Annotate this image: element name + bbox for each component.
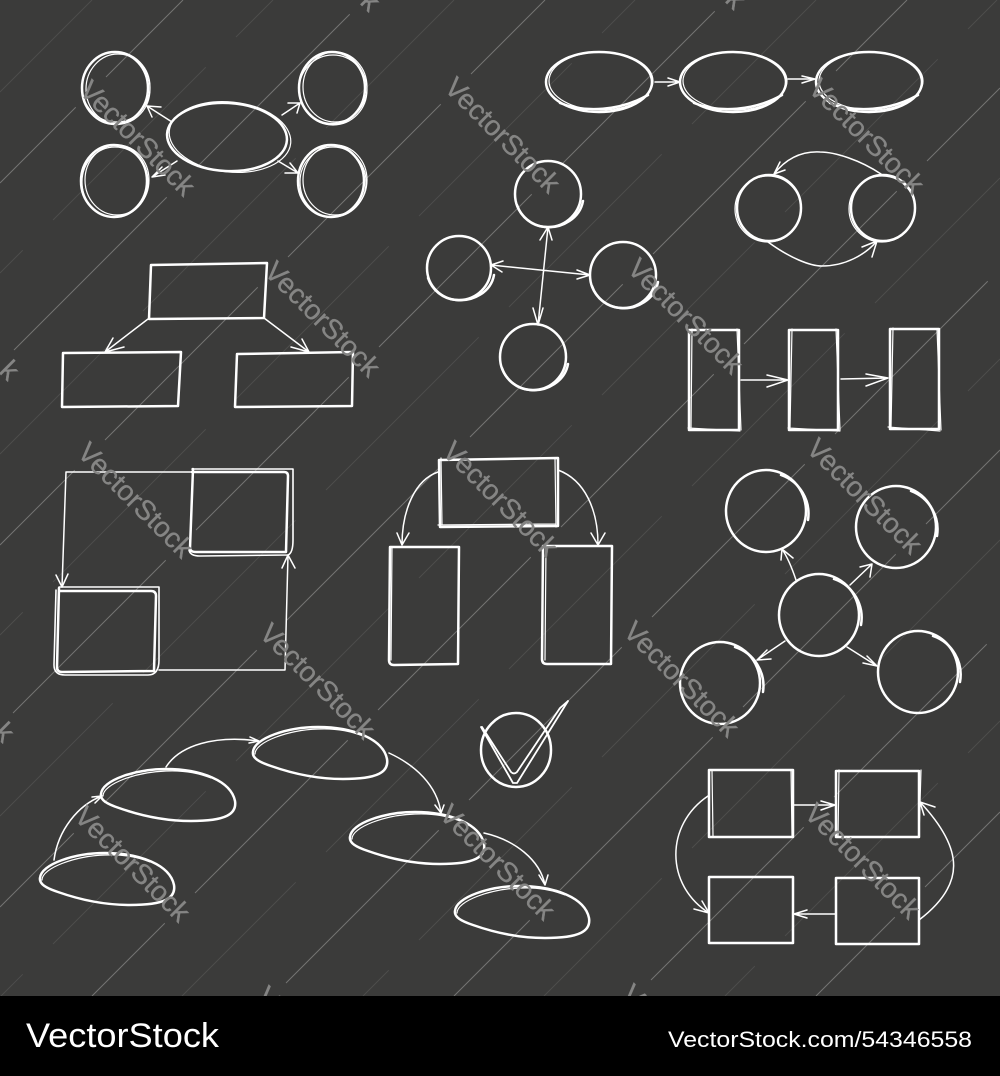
watermark: repeated VectorStock text: VectorStock (74, 74, 202, 203)
watermark: repeated VectorStock text: VectorStock (259, 255, 387, 384)
watermark: repeated VectorStock text: VectorStock (254, 617, 382, 746)
diagram: three ovals in a row (546, 52, 923, 112)
watermark: repeated VectorStock text: VectorStock (622, 252, 750, 381)
diagram: box tree, one parent and two children (62, 263, 353, 407)
diagram: cross with four circles (427, 161, 658, 390)
watermark: repeated VectorStock text: VectorStock (618, 615, 746, 744)
diagram: box branching to two tall boxes (389, 458, 612, 665)
diagram: two circles in a cycle (735, 152, 915, 266)
footer bar (0, 996, 1000, 1076)
watermark: repeated VectorStock text: VectorStock (801, 432, 929, 561)
watermark: repeated VectorStock text: VectorStock (803, 72, 931, 201)
watermark: repeated VectorStock text: VectorStock (72, 436, 200, 565)
watermark: repeated VectorStock text: VectorStock (69, 800, 197, 929)
watermark: repeated VectorStock text: V (616, 978, 651, 1014)
diagram: chain of hand-drawn ovals (40, 727, 589, 938)
diagram: four boxes in a loop (676, 770, 954, 944)
icon: check mark in circle (481, 701, 568, 787)
watermark: repeated VectorStock text: VectorStock (434, 798, 562, 927)
footer image id: VectorStock.com/54346558 (668, 1027, 972, 1052)
diagram: three vertical bars (688, 328, 941, 431)
watermark: repeated VectorStock text: V (251, 980, 286, 1016)
watermark: repeated VectorStock text: VectorStock (439, 71, 567, 200)
footer logo text: VectorStock (26, 1017, 220, 1055)
watermark: repeated VectorStock text: VectorStock (437, 435, 565, 564)
diagram: central circle with four circles (680, 470, 961, 724)
diagram: oval hub with four circles (81, 52, 367, 217)
watermark: repeated VectorStock text: VectorStock (799, 797, 927, 926)
diagram: two squares linked by large rectangle (54, 469, 295, 675)
